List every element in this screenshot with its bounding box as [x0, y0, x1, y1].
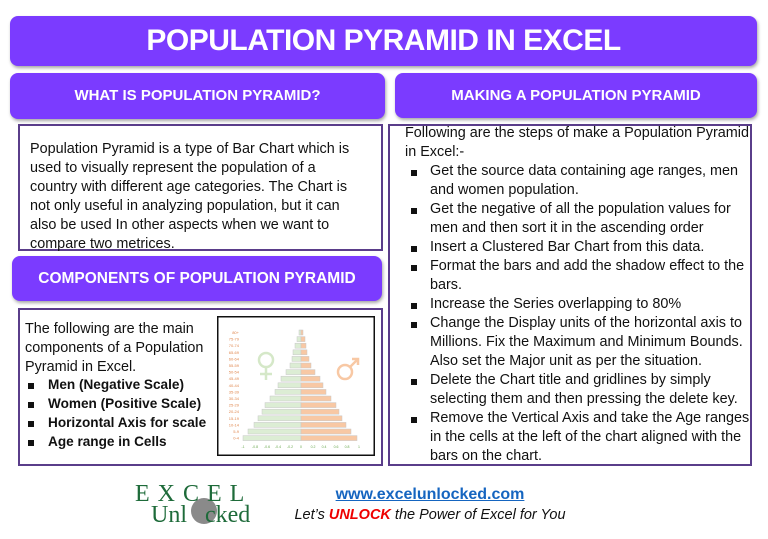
panel: components	[18, 308, 383, 466]
panel: definition text: also be used In other aspects when we want to	[30, 217, 329, 233]
chart: population pyramid: -1	[241, 445, 245, 449]
panel: definition text: not only useful in analyzing population, but it can	[30, 198, 340, 214]
panel: components: Horizontal Axis for scale	[48, 415, 206, 430]
panel: steps: Get the source data containing age ranges, men	[430, 163, 738, 179]
panel: steps: Change the Display units of the horizontal axis to	[430, 315, 742, 331]
icon: male symbol	[338, 359, 358, 379]
panel: steps: and women population.	[430, 182, 579, 198]
panel: components: Pyramid in Excel.	[25, 359, 136, 375]
panel: definition text	[18, 124, 383, 251]
panel: definition text: used to visually represent the population of a	[30, 160, 316, 176]
heading: making a population pyramid: MAKING A POPULATION PYRAMID	[451, 87, 701, 104]
chart: population pyramid: 25-29	[229, 403, 240, 408]
panel: definition text: country with different age categories. The Chart is	[30, 179, 347, 195]
panel: steps: Increase the Series overlapping to 80%	[430, 296, 681, 312]
chart: population pyramid: -0.2	[287, 445, 293, 449]
panel: components: Women (Positive Scale)	[48, 396, 201, 411]
chart: population pyramid: 65-69	[229, 350, 240, 355]
chart: population pyramid: 0	[300, 445, 302, 449]
panel: components: components of a Population	[25, 340, 203, 356]
chart: population pyramid: 0.8	[345, 445, 349, 449]
chart: population pyramid: 70-74	[229, 343, 240, 348]
chart: population pyramid: -0.8	[252, 445, 258, 449]
panel: steps: Following are the steps of make a Population Pyramid	[405, 125, 749, 141]
chart: population pyramid: 0.4	[322, 445, 326, 449]
chart: population pyramid: 1	[358, 445, 360, 449]
heading: components	[12, 256, 382, 301]
footer: website and tagline: Let’s UNLOCK the Power of Excel for You	[294, 507, 566, 523]
chart: population pyramid: 15-19	[229, 416, 240, 421]
chart: population pyramid: -0.4	[275, 445, 281, 449]
logo: Excel Unlocked: Unl cked	[151, 502, 250, 528]
panel: steps: Also set the Major unit as per the situation.	[430, 353, 702, 369]
panel: steps: men and then sort it in the ascending order	[430, 220, 704, 236]
heading: components: COMPONENTS OF POPULATION PYRAMID	[38, 270, 356, 287]
footer: website and tagline	[294, 486, 566, 523]
chart: population pyramid: 40-44	[229, 383, 240, 388]
panel: steps: Delete the Chart title and gridlines by simply	[430, 372, 711, 388]
logo: Excel Unlocked	[135, 481, 252, 528]
icon: female symbol	[259, 353, 273, 380]
panel: components: Age range in Cells	[48, 434, 167, 449]
panel: steps: bars.	[430, 277, 462, 293]
panel: steps: Format the bars and add the shadow effect to the	[430, 258, 744, 274]
chart: population pyramid: 50-54	[229, 370, 240, 375]
chart: population pyramid: 10-14	[229, 422, 240, 427]
chart: population pyramid: 20-24	[229, 409, 240, 414]
heading: making a population pyramid	[395, 73, 757, 118]
panel: definition text: Population Pyramid is a type of Bar Chart which is	[30, 141, 349, 157]
panel: steps: Millions. Fix the Maximum and Minimum Bounds.	[430, 334, 743, 350]
panel: steps: in the cells at the left of the chart aligned with the	[430, 429, 741, 445]
title	[10, 16, 757, 66]
chart: population pyramid: 0.6	[334, 445, 338, 449]
panel: components: The following are the main	[25, 321, 194, 337]
chart: population pyramid: 0.2	[311, 445, 315, 449]
panel: components: Men (Negative Scale)	[48, 377, 184, 392]
heading: what is population pyramid	[10, 73, 385, 119]
panel: steps: selecting them and then pressing the delete key.	[430, 391, 738, 407]
panel: steps: in Excel:-	[405, 144, 464, 160]
chart: population pyramid	[217, 316, 375, 456]
panel: steps: Insert a Clustered Bar Chart from this data.	[430, 239, 704, 255]
panel: steps: Get the negative of all the population values for	[430, 201, 731, 217]
chart: population pyramid: 60-64	[229, 356, 240, 361]
chart: population pyramid: 75-79	[229, 337, 240, 342]
chart: population pyramid: 55-59	[229, 363, 240, 368]
heading: what is population pyramid: WHAT IS POPULATION PYRAMID?	[74, 87, 321, 104]
chart: population pyramid: 30-34	[229, 396, 240, 401]
panel: definition text: compare two metrices.	[30, 236, 175, 252]
title: POPULATION PYRAMID IN EXCEL	[146, 24, 621, 57]
chart: population pyramid: 35-39	[229, 389, 240, 394]
chart: population pyramid: 80+	[232, 330, 240, 335]
chart: population pyramid: -0.6	[264, 445, 270, 449]
panel: steps: bars on the chart.	[430, 448, 542, 464]
panel: steps: Remove the Vertical Axis and take the Age ranges	[430, 410, 749, 426]
panel: steps	[388, 124, 752, 466]
chart: population pyramid: 5-9	[233, 429, 240, 434]
chart: population pyramid: 0-4	[233, 436, 240, 441]
logo: Excel Unlocked: EXCEL	[135, 481, 252, 507]
footer: website and tagline: www.excelunlocked.com	[336, 486, 524, 503]
chart: population pyramid: 45-49	[229, 376, 240, 381]
